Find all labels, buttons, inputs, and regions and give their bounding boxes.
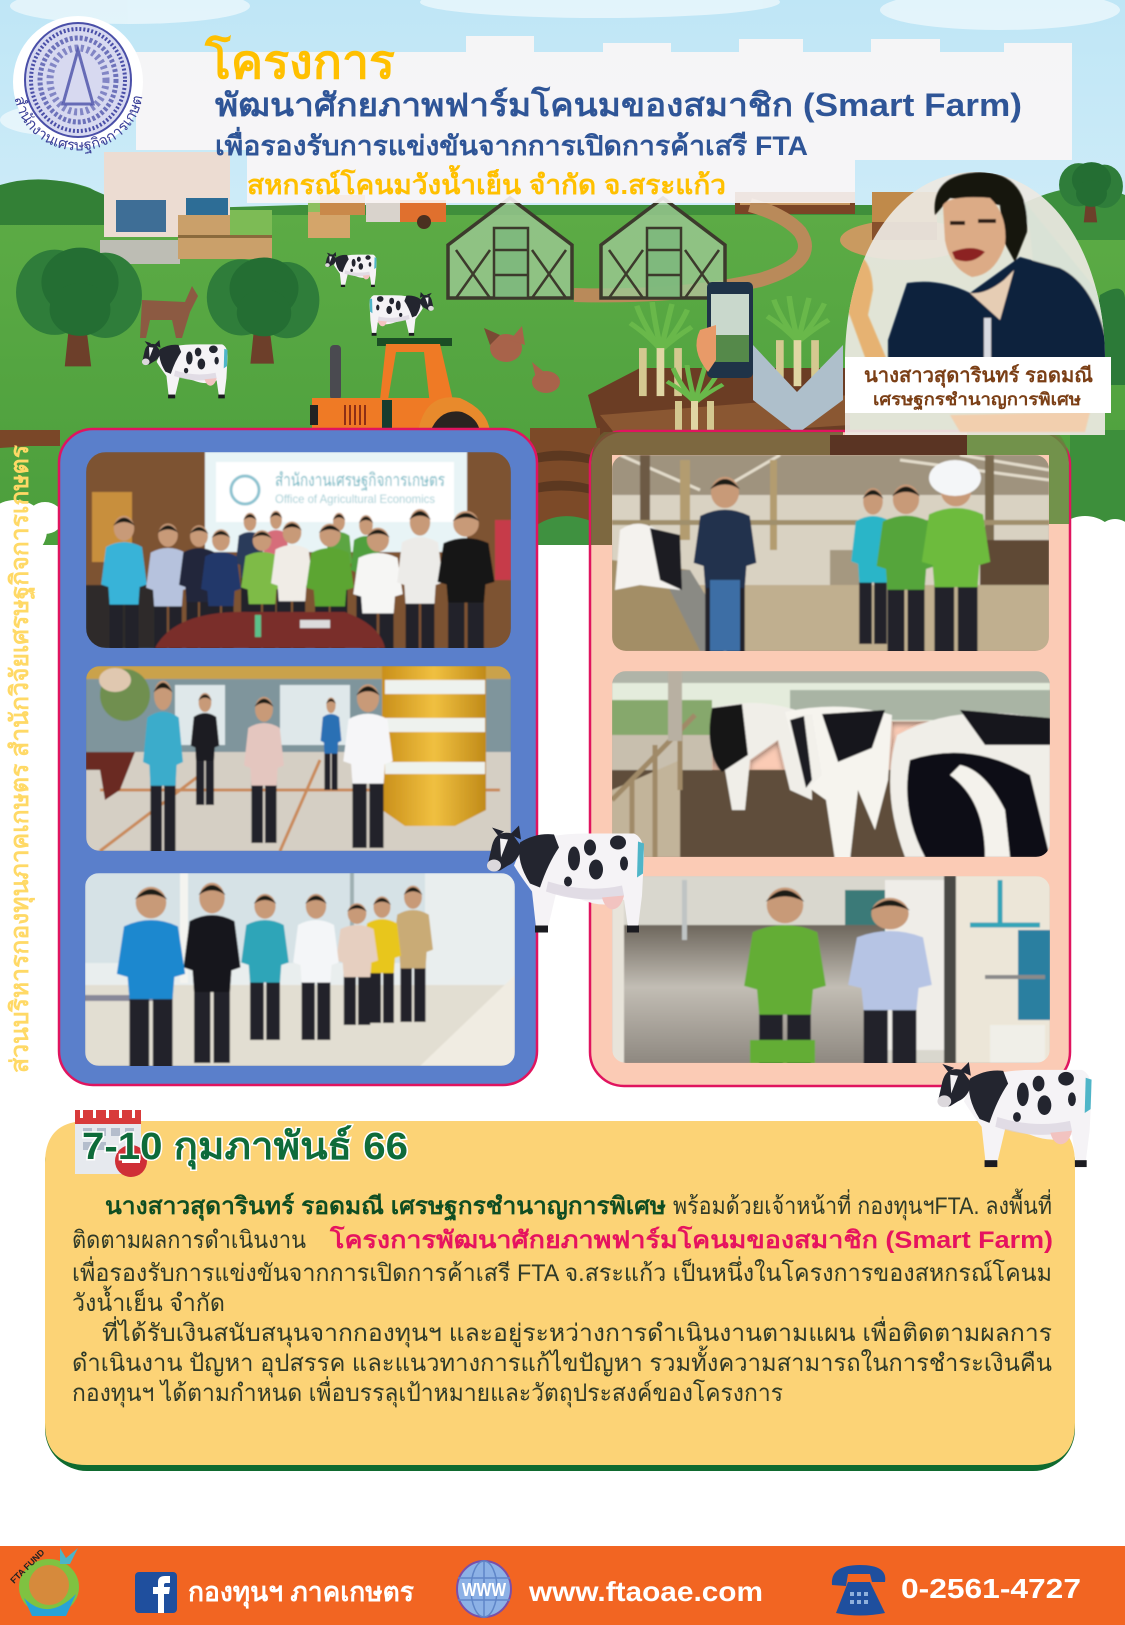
icon: greenhouses xyxy=(448,198,725,298)
news body text: โครงการพัฒนาศักยภาพฟาร์มโคนมของสมาชิก (Smart Farm) xyxy=(329,1225,1053,1254)
icon: FTA FUND logo xyxy=(8,1547,79,1616)
translucent title banner xyxy=(136,36,1072,203)
photo: group in milk product room xyxy=(86,666,511,854)
date heading: 7-10 กุมภาพันธ์ 66 xyxy=(82,1125,408,1170)
icon: smartphone xyxy=(696,282,753,378)
path xyxy=(574,205,805,295)
photo: farm visit in barn xyxy=(612,455,1049,660)
clouds lower edge xyxy=(0,500,1125,645)
icon: goat xyxy=(140,286,198,338)
farm scene background xyxy=(0,0,1125,645)
news body text xyxy=(72,1188,1053,1408)
news body text: ติดตามผลการดำเนินงาน xyxy=(72,1227,306,1254)
panel: blue photo panel xyxy=(59,429,537,1085)
icon: tractor xyxy=(310,338,490,432)
title line: project name: พัฒนาศักยภาพฟาร์มโคนมของสมาชิก (Smart Farm) xyxy=(215,86,1022,123)
icon: trees xyxy=(16,162,1123,366)
photo: milk tank room xyxy=(612,876,1050,1063)
title: โครงการ: โครงการ xyxy=(204,34,395,88)
footer bar xyxy=(0,1546,1125,1625)
icon: FTA FUND logo: FTA FUND xyxy=(8,1547,47,1585)
news body text: กองทุนฯ ได้ตามกำหนด เพื่อบรรลุเป้าหมายและวัตถุประสงค์ของโครงการ xyxy=(72,1376,783,1408)
photo: group in meeting room: สำนักงานเศรษฐกิจการเกษตร xyxy=(275,470,445,491)
icon: chickens xyxy=(484,326,560,393)
icon: www globe: WWW xyxy=(462,1580,506,1600)
title line: purpose: เพื่อรองรับการแข่งขันจากการเปิดการค้าเสรี FTA xyxy=(215,126,808,161)
vertical side text: ส่วนบริหารกองทุนภาคเกษตร สำนักวิจัยเศรษฐกิจการเกษตร xyxy=(6,444,36,1073)
panel: news text box xyxy=(45,1121,1075,1471)
news body text: พร้อมด้วยเจ้าหน้าที่ กองทุนฯFTA. ลงพื้นที่ xyxy=(673,1188,1052,1221)
news body text: นางสาวสุดารินทร์ รอดมณี เศรษฐกรชำนาญการพิเศษ xyxy=(105,1192,666,1222)
speaker name plate: นางสาวสุดารินทร์ รอดมณี xyxy=(864,364,1093,388)
icon: cow between panels xyxy=(487,826,644,932)
news body text: ดำเนินงาน ปัญหา อุปสรรค และแนวทางการแก้ไขปัญหา รวมทั้งความสามารถในการชำระเงินคืน xyxy=(72,1345,1052,1378)
photo: dairy cows in stall xyxy=(612,671,1050,860)
icon: scene cows xyxy=(142,252,434,398)
news body text: ที่ได้รับเงินสนับสนุนจากกองทุนฯ และอยู่ระหว่างการดำเนินงานตามแผน เพื่อติดตามผลการ xyxy=(102,1316,1052,1348)
news body text: วังน้ำเย็น จำกัด xyxy=(72,1285,225,1317)
panel: peach photo panel xyxy=(590,431,1070,1086)
shop, crates, truck, barn xyxy=(100,152,970,264)
telephone number: 0-2561-4727 xyxy=(901,1573,1081,1604)
speaker name plate xyxy=(845,357,1111,413)
speaker name plate: เศรษฐกรชำนาญการพิเศษ xyxy=(873,390,1081,411)
icon: grey-blue V arrow xyxy=(753,345,843,434)
website address: www.ftaoae.com xyxy=(528,1576,763,1607)
photo: group in corridor xyxy=(85,873,515,1072)
title line: cooperative: สหกรณ์โคนมวังน้ำเย็น จำกัด จ.สระแก้ว xyxy=(247,164,726,200)
icon: telephone xyxy=(832,1565,885,1616)
icon: www globe xyxy=(457,1561,511,1617)
icon: facebook xyxy=(135,1572,177,1613)
facebook page name: กองทุนฯ ภาคเกษตร xyxy=(188,1577,414,1609)
icon: calendar xyxy=(75,1106,147,1177)
speaker photo in arch xyxy=(841,172,1107,435)
photo: group in meeting room: Office of Agricultural Economics xyxy=(275,492,435,506)
news body text: เพื่อรองรับการแข่งขันจากการเปิดการค้าเสรี FTA จ.สระแก้ว เป็นหนึ่งในโครงการของสหกรณ์โคนม xyxy=(72,1256,1052,1287)
icon: field and plants xyxy=(588,296,850,440)
photo: group in meeting room xyxy=(86,452,511,669)
soil strips xyxy=(0,430,60,448)
icon: cow on text box xyxy=(937,1062,1092,1167)
